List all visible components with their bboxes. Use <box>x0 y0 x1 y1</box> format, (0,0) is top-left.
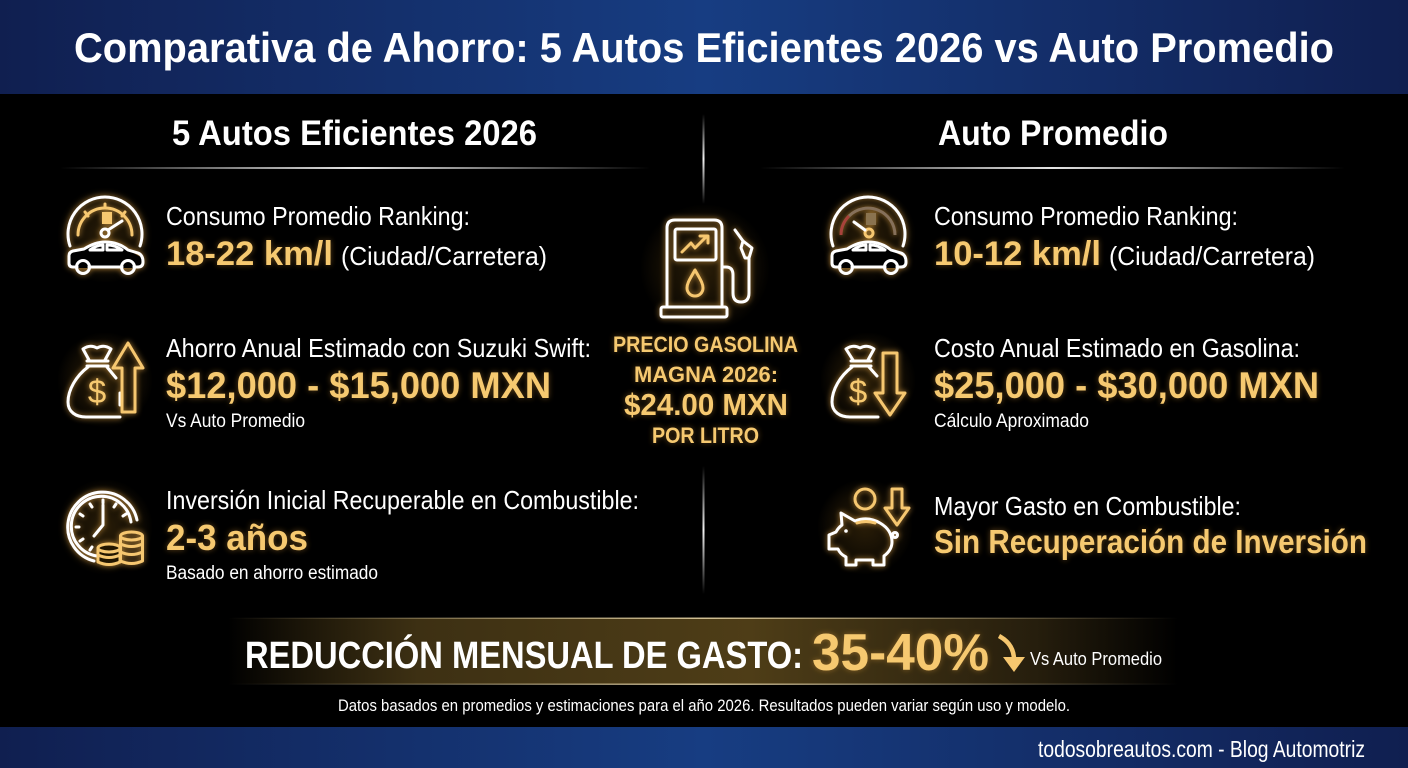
text block: average annual cost: Costo Anual Estimado en Gasolina: <box>934 333 1300 363</box>
footnote: Datos basados en promedios y estimaciones para el año 2026. Resultados pueden variar según uso y modelo. <box>338 696 1070 715</box>
text block: estimated annual saving <box>166 333 591 432</box>
text block: average annual cost: Cálculo Aproximado <box>934 411 1089 432</box>
text block: recoverable investment: Basado en ahorro estimado <box>166 563 378 584</box>
price text: $24.00 MXN <box>624 387 788 422</box>
text block: recoverable investment: Inversión Inicial Recuperable en Combustible: <box>166 485 639 515</box>
title: Comparativa de Ahorro: 5 Autos Eficientes 2026 vs Auto Promedio <box>74 24 1334 71</box>
text block: average annual cost <box>934 333 1319 432</box>
footer band <box>0 727 1408 768</box>
text block: recoverable investment: 2-3 años <box>166 517 308 558</box>
text block: estimated annual saving: Ahorro Anual Estimado con Suzuki Swift: <box>166 333 591 363</box>
text block: estimated annual saving: $12,000 - $15,000 MXN <box>166 365 551 406</box>
icon: gauge and efficient car <box>57 187 153 283</box>
text block: average annual cost: $25,000 - $30,000 MXN <box>934 365 1319 406</box>
icon: piggy bank <box>817 479 913 575</box>
price text <box>613 332 798 448</box>
text block: average consumption: 10-12 km/l <box>934 235 1101 273</box>
icon: money bag with down arrow: $ <box>849 373 867 410</box>
text block: average consumption <box>934 201 1315 273</box>
text block: efficient consumption <box>166 201 547 273</box>
text block: efficient consumption: Consumo Promedio Ranking: <box>166 201 470 231</box>
icon: clock and coins <box>57 479 153 575</box>
text block: no investment recovery: Sin Recuperación de Inversión <box>934 523 1367 560</box>
left column heading: 5 Autos Eficientes 2026 <box>172 114 537 153</box>
banner: monthly reduction: Vs Auto Promedio <box>1030 649 1162 669</box>
text block: average consumption: Consumo Promedio Ranking: <box>934 201 1238 231</box>
price text: PRECIO GASOLINA <box>613 332 798 357</box>
text block: no investment recovery: Mayor Gasto en Combustible: <box>934 491 1241 521</box>
banner: monthly reduction <box>228 618 1178 685</box>
text block: efficient consumption: 18-22 km/l <box>166 235 333 273</box>
icon: money bag with up arrow <box>57 332 153 428</box>
price text: MAGNA 2026: <box>634 362 778 387</box>
text block: estimated annual saving: Vs Auto Promedio <box>166 411 305 432</box>
icon: gauge and average car <box>820 187 916 283</box>
header band with title <box>0 0 1408 94</box>
text block: average consumption: (Ciudad/Carretera) <box>1109 241 1315 271</box>
text block: no investment recovery <box>934 491 1367 560</box>
icon: fuel pump <box>661 220 752 317</box>
icon: curved down arrow <box>999 636 1025 672</box>
percentage: 35-40% <box>812 624 989 682</box>
banner: monthly reduction: REDUCCIÓN MENSUAL DE GASTO: <box>245 633 803 677</box>
icon: money bag with up arrow: $ <box>88 373 106 410</box>
panel: gasoline price <box>613 204 798 448</box>
price text: POR LITRO <box>652 423 759 448</box>
icon: money bag with down arrow <box>820 332 916 428</box>
text block: efficient consumption: (Ciudad/Carretera) <box>341 241 547 271</box>
text block: recoverable investment <box>166 485 639 584</box>
right column heading: Auto Promedio <box>938 114 1168 153</box>
